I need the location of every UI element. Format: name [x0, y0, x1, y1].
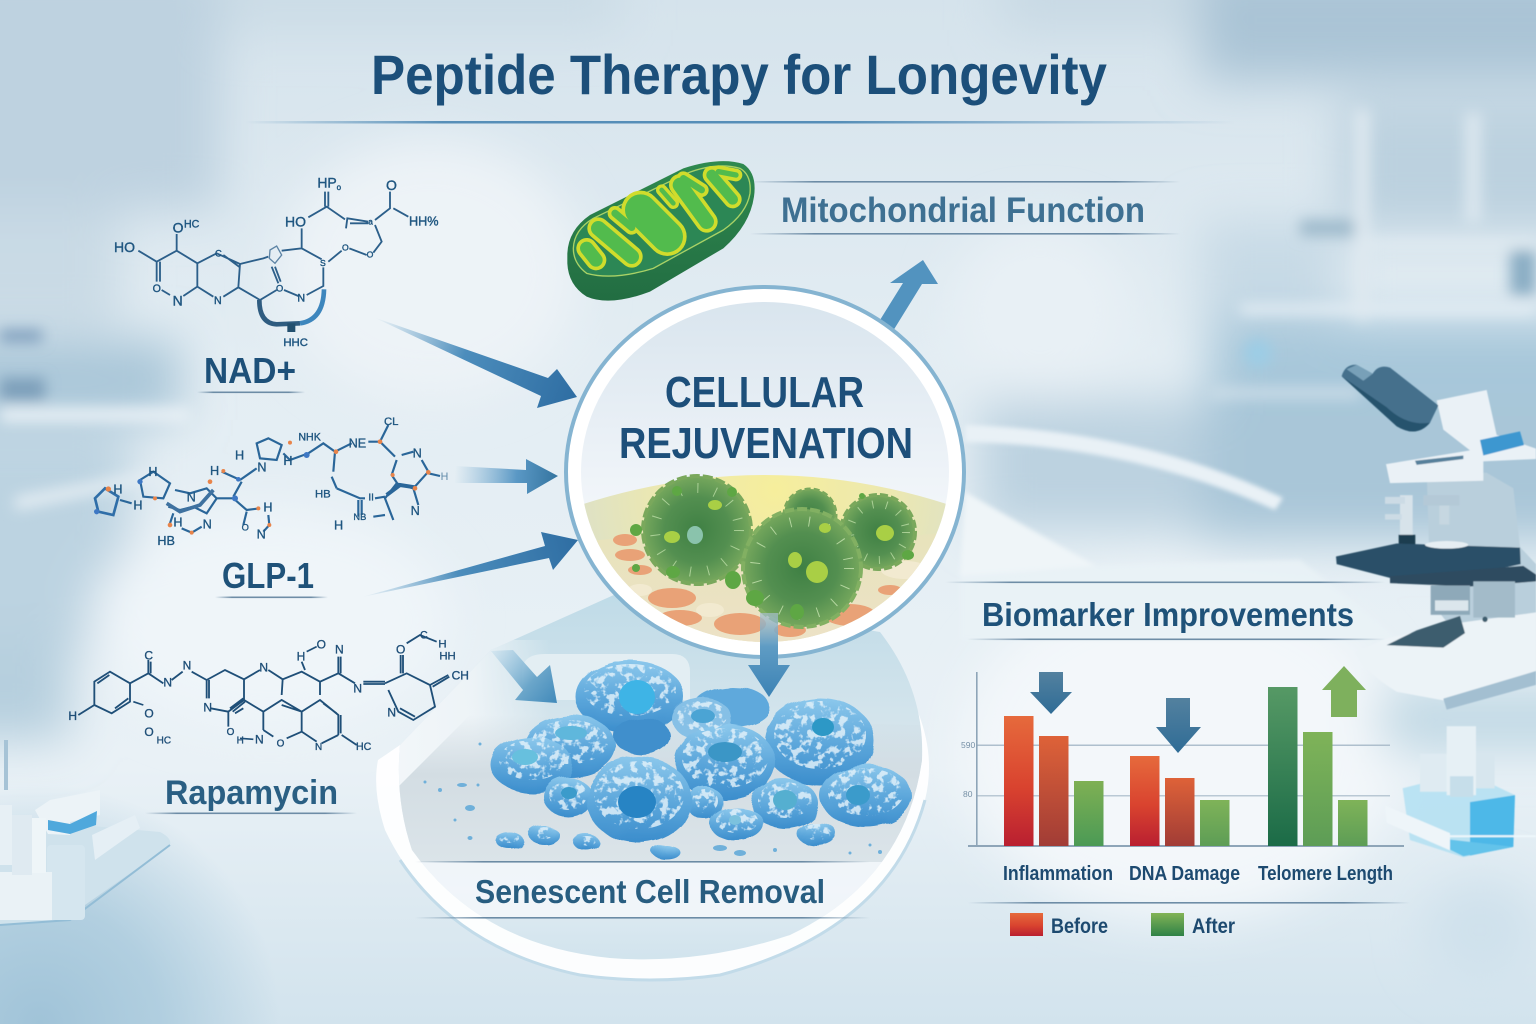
arrow: NAD+ to center — [373, 317, 577, 408]
molecule: NAD+: O — [173, 220, 184, 236]
microscope head — [1386, 390, 1536, 483]
interior fill — [398, 595, 922, 960]
molecule: NAD+: a — [368, 218, 373, 227]
label: Rapamycin: Rapamycin — [165, 774, 338, 812]
heading: Senescent Cell Removal — [475, 873, 825, 910]
icon: mitochondrion — [567, 161, 755, 301]
microscope arm — [1427, 471, 1536, 643]
molecule: Rapamycin: H — [438, 638, 447, 650]
molecule: Rapamycin: C — [144, 648, 153, 662]
molecule: GLP-1: HB — [157, 534, 175, 548]
molecule: GLP-1: N — [257, 461, 266, 475]
microscope base — [1355, 612, 1536, 700]
molecule: Rapamycin: O — [144, 725, 154, 739]
molecule: GLP-1: H — [283, 454, 292, 468]
cell nuclei — [512, 680, 870, 825]
molecule: GLP-1: N — [203, 517, 212, 531]
molecule: NAD+: HC — [184, 218, 200, 230]
bottom-left floor shade — [0, 780, 290, 1024]
molecule: Rapamycin: N — [203, 701, 212, 715]
molecule: Rapamycin: N — [335, 642, 344, 656]
outer white ring — [376, 632, 929, 980]
molecule: GLP-1: H — [441, 471, 448, 483]
heading: Biomarker Improvements — [982, 596, 1354, 633]
panel: senescent cell removal — [376, 580, 940, 980]
molecule: Rapamycin: N — [259, 661, 268, 675]
molecule: Rapamycin: HH — [439, 650, 456, 662]
category labels — [1003, 863, 1393, 885]
label: GLP-1: GLP-1 — [222, 555, 314, 596]
bars: telomere length — [1268, 687, 1368, 846]
molecule: Rapamycin — [68, 629, 469, 753]
molecule: Rapamycin: O — [317, 637, 326, 651]
molecule: GLP-1: N — [257, 527, 266, 541]
molecule: NAD+: N — [297, 292, 305, 304]
background microscope — [1336, 365, 1536, 710]
arrow: center to senescent cells — [748, 613, 790, 697]
molecule: GLP-1: II — [368, 493, 374, 504]
molecule: Rapamycin: N — [183, 658, 191, 672]
legend divider — [968, 902, 1410, 904]
heading: mitochondrial function: Mitochondrial Function — [781, 191, 1145, 230]
molecule: GLP-1: H — [173, 516, 182, 530]
molecule: GLP-1: H — [113, 482, 122, 496]
molecule: Rapamycin: H — [68, 709, 77, 723]
molecule: GLP-1: H — [133, 498, 142, 512]
panel: central cellular rejuvenation circle — [560, 287, 970, 660]
molecule: NAD+: O — [153, 283, 161, 295]
eyepieces — [1342, 365, 1438, 431]
molecule: GLP-1: HB — [315, 488, 331, 500]
molecule: GLP-1: CL — [384, 416, 398, 428]
bottom divider — [415, 917, 870, 919]
molecule: GLP-1: H — [263, 501, 272, 515]
outer ring edge — [400, 800, 925, 980]
molecule: Rapamycin: N — [353, 682, 362, 696]
molecule: NAD+: O — [386, 177, 397, 193]
axes and grid: 590 — [961, 740, 975, 750]
molecule: Rapamycin: O — [144, 706, 154, 720]
molecule: GLP-1: H — [148, 465, 157, 479]
category labels: Inflammation — [1003, 863, 1113, 885]
molecule: NAD+: HHC — [283, 337, 308, 349]
title underline — [245, 121, 1235, 124]
label: NAD+: NAD+ — [204, 350, 296, 391]
molecule: GLP-1: N — [187, 491, 196, 505]
orange soil cells — [613, 534, 902, 637]
arrow: inflammation down — [1030, 672, 1072, 714]
molecule: GLP-1: O — [242, 523, 249, 533]
molecule: GLP-1: NHK — [298, 432, 321, 444]
cellular label line one: CELLULAR — [665, 368, 864, 417]
molecule: NAD+: N — [214, 295, 222, 307]
outer ring — [566, 287, 964, 657]
category labels: DNA Damage — [1129, 863, 1240, 885]
molecule: GLP-1: N — [413, 446, 422, 460]
stage — [1336, 543, 1521, 580]
molecule: Rapamycin: O — [227, 727, 235, 738]
molecule: GLP-1: H — [235, 448, 244, 462]
arrow: telomere up — [1322, 666, 1366, 717]
panel: biomarker improvements — [945, 582, 1410, 938]
axes and grid: 80 — [963, 789, 973, 799]
molecule: NAD+: HO — [285, 214, 306, 230]
inner disc — [581, 302, 949, 642]
arrow: center to mitochondrial function — [880, 260, 938, 331]
molecule: Rapamycin: N — [315, 742, 322, 753]
molecule: Rapamycin: N — [255, 732, 264, 746]
molecule: Rapamycin: O — [277, 739, 285, 750]
bars: DNA damage — [1130, 756, 1230, 846]
molecule: NAD+: O — [276, 284, 283, 294]
legend: After — [1192, 915, 1235, 938]
molecule: GLP-1 — [94, 416, 448, 548]
cristae — [587, 172, 736, 260]
molecule: NAD+: HP — [317, 174, 337, 190]
scattered debris — [424, 742, 882, 856]
molecule: Rapamycin: CH — [452, 668, 469, 682]
legend — [1010, 913, 1235, 938]
molecule: NAD+: N — [173, 292, 183, 308]
background vials left — [0, 740, 170, 925]
green cells — [630, 476, 915, 627]
arrow: DNA damage down — [1156, 698, 1201, 753]
molecule: Rapamycin: N — [163, 676, 172, 690]
molecule: GLP-1: NE — [349, 436, 366, 450]
molecule: NAD+: O — [367, 249, 374, 259]
bar chart — [961, 666, 1404, 885]
background vials right — [1385, 726, 1536, 857]
molecule: NAD+: HO — [114, 239, 135, 255]
molecule: NAD+: C — [215, 249, 222, 259]
molecule: NAD+: S — [320, 258, 326, 268]
molecule: GLP-1: H — [334, 518, 343, 532]
molecule: GLP-1: H — [210, 464, 219, 478]
molecule: Rapamycin: HC — [356, 741, 372, 753]
axes and grid — [961, 672, 1404, 847]
arrow: GLP-1 to center — [455, 459, 558, 494]
molecule: Rapamycin: H — [237, 735, 244, 746]
cell surface texture — [499, 664, 904, 846]
bars: inflammation — [1004, 716, 1104, 846]
top divider — [415, 861, 870, 863]
arrow: into senescent cells — [491, 650, 557, 703]
molecule: Rapamycin: N — [387, 706, 396, 720]
title: Peptide Therapy for Longevity — [371, 43, 1107, 106]
molecule: Rapamycin: H — [297, 650, 305, 664]
molecule: Rapamycin: HC — [157, 735, 171, 746]
molecule: GLP-1: N — [411, 504, 420, 518]
category labels: Telomere Length — [1258, 863, 1393, 885]
legend: Before — [1051, 915, 1108, 938]
molecule: NAD+: HH% — [409, 214, 439, 228]
molecule: NAD+: o — [337, 183, 342, 192]
objectives — [1400, 495, 1413, 537]
molecule: GLP-1: NB — [353, 512, 366, 522]
heading divider — [967, 638, 1385, 640]
outer membrane — [567, 161, 755, 301]
inner membrane — [573, 166, 750, 276]
top divider — [945, 582, 1385, 583]
molecule: NAD+ — [114, 174, 439, 349]
cellular label line two: REJUVENATION — [619, 419, 913, 468]
cell scene — [584, 474, 946, 642]
molecule: Rapamycin: O — [396, 642, 405, 656]
blue cells cluster — [424, 660, 912, 859]
molecule: NAD+: O — [342, 243, 349, 253]
molecule: Rapamycin: C — [420, 629, 428, 641]
arrow: Rapamycin to center — [362, 532, 578, 597]
